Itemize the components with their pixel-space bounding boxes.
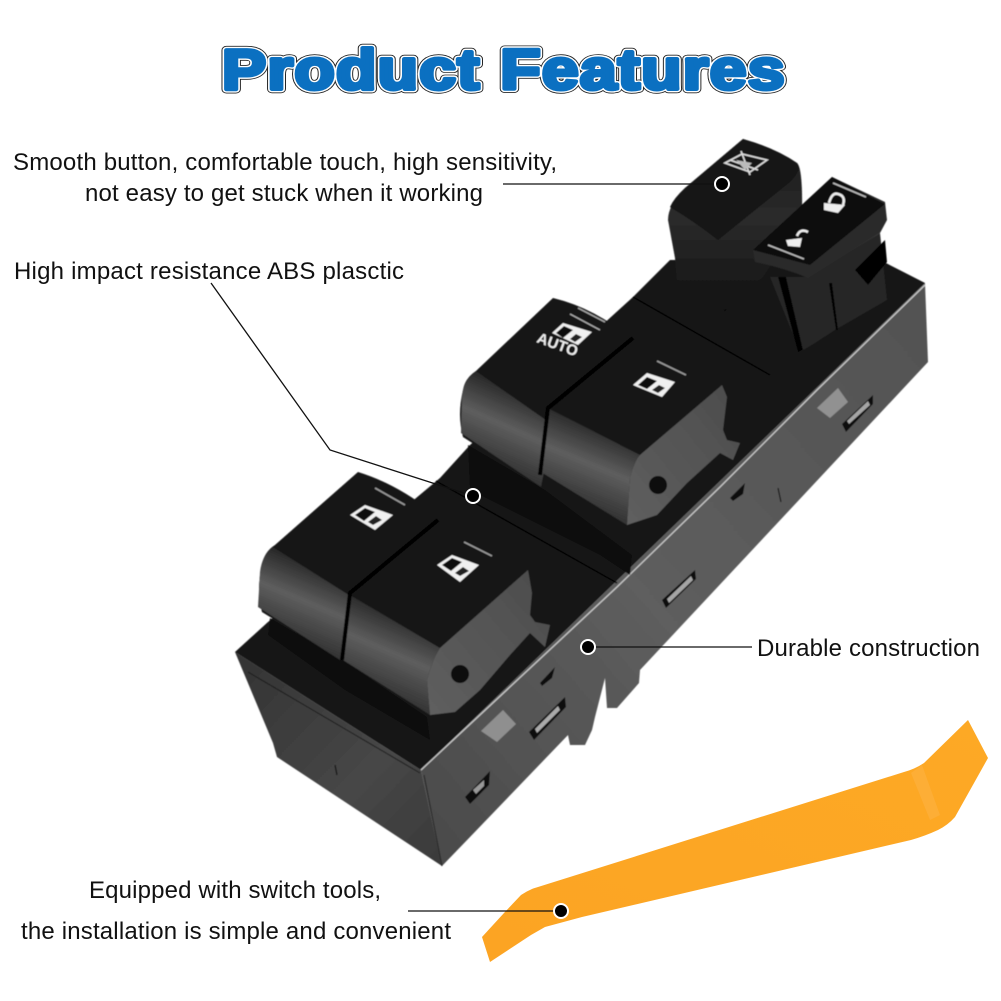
gap between front buttons (342, 520, 438, 660)
callout: ABS plastic: High impact resistance ABS plasctic (14, 258, 404, 285)
side clips and slots (465, 388, 873, 804)
AUTO label: AUTO (535, 330, 580, 360)
front pair base (268, 618, 430, 740)
right side face of housing (421, 283, 928, 866)
left face of housing (235, 652, 442, 866)
callout: ABS plastic (14, 258, 480, 503)
lock switch stem (770, 233, 887, 352)
gap between rear buttons (540, 338, 633, 475)
orange pry tool (482, 720, 988, 962)
window icon (350, 505, 393, 530)
window switch assembly (235, 139, 928, 866)
window lock icon (725, 151, 767, 175)
title: Product Features (222, 38, 785, 102)
callout: switch tools: the installation is simple and convenient (21, 918, 451, 945)
top plate of housing (235, 260, 925, 770)
title: Product Features (222, 38, 785, 102)
lock open icon (786, 231, 808, 247)
callout: smooth button (13, 149, 729, 207)
callout: smooth button: Smooth button, comfortable touch, high sensitivity, (13, 149, 557, 176)
window icon (633, 373, 675, 397)
housing edge highlights (248, 285, 925, 866)
callout: durable construction (581, 635, 980, 662)
window icon (552, 323, 592, 345)
window icon (437, 555, 479, 582)
window lock button (668, 139, 802, 312)
front button 2 (343, 522, 550, 715)
callout: switch tools (21, 877, 568, 945)
front button 1 (258, 472, 438, 660)
rear button 2 (541, 340, 740, 525)
lock closed icon (824, 194, 845, 213)
callout: smooth button: not easy to get stuck when it working (85, 180, 483, 207)
rear pair base (468, 445, 632, 575)
callout: durable construction: Durable construction (757, 635, 980, 662)
callout: switch tools: Equipped with switch tools, (89, 877, 381, 904)
door lock rocker (753, 177, 887, 278)
rear button 1 AUTO (460, 298, 633, 487)
title: Product Features (222, 38, 785, 102)
lock switch stem shadow and ribs (778, 240, 887, 352)
